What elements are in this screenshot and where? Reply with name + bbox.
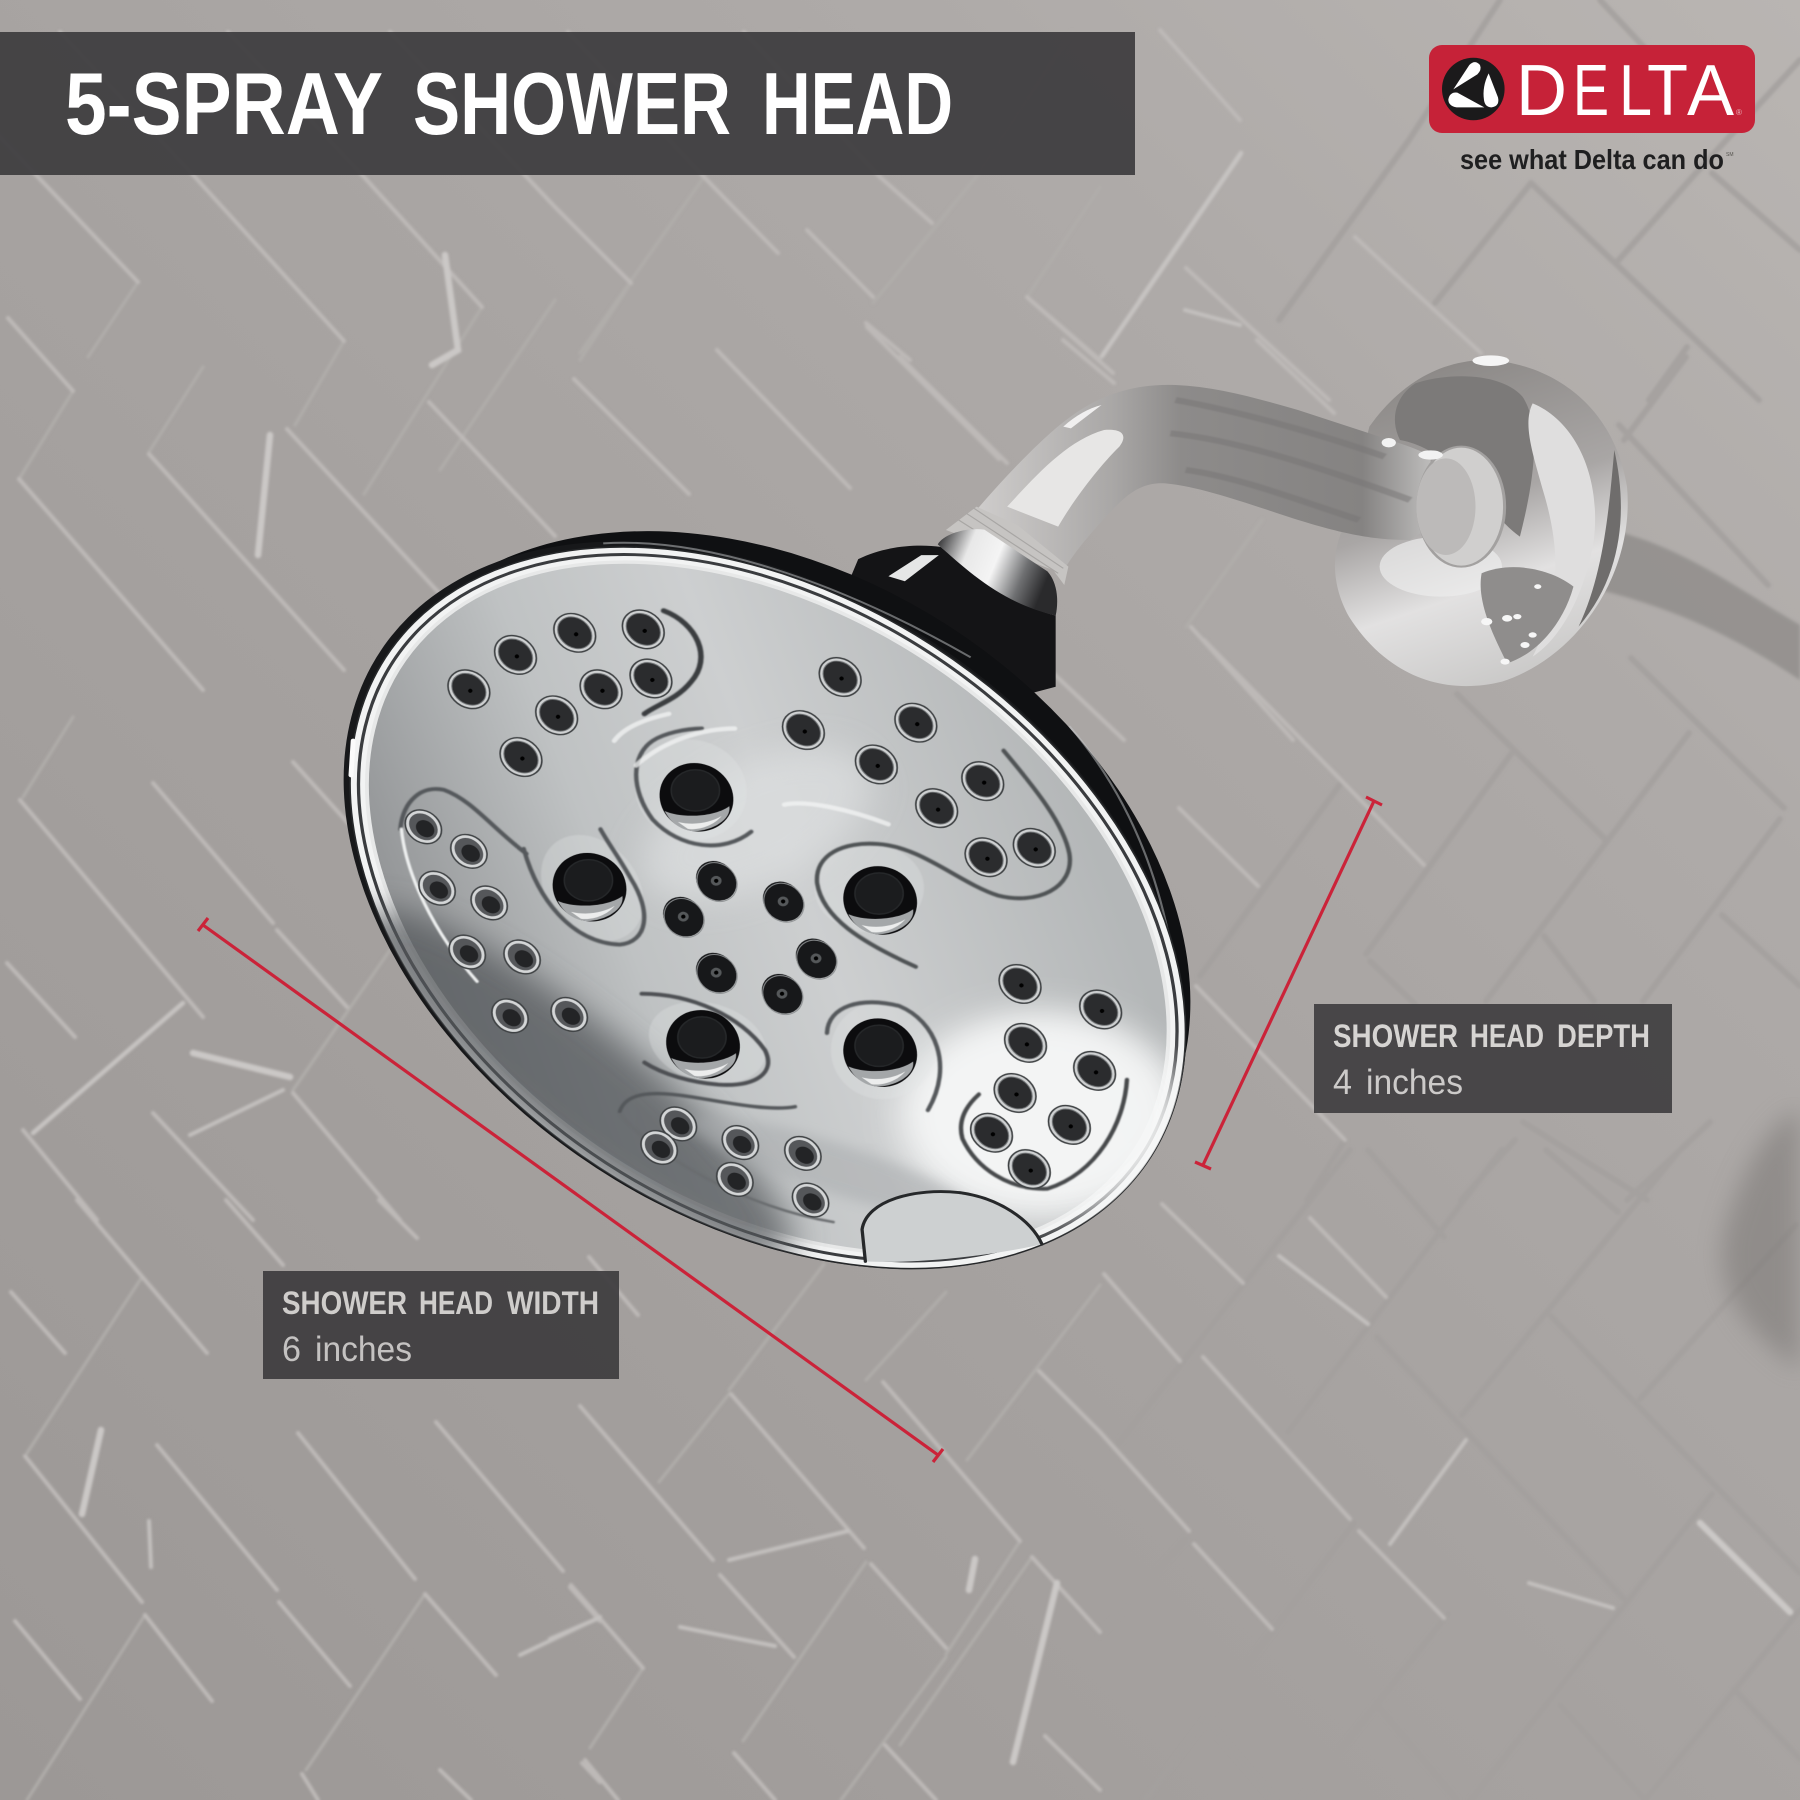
- pipe shadow at right: [1600, 530, 1800, 680]
- wall flange: [1335, 355, 1628, 686]
- shower head: [344, 529, 1190, 1270]
- callout: shower head width: [263, 1271, 619, 1379]
- logo badge: ®: [1736, 108, 1742, 117]
- spray recess swirls: [400, 611, 1127, 1222]
- head body: [184, 384, 1351, 1416]
- callout: shower head width: WIDTH: [507, 1285, 599, 1321]
- Delta logo: [1429, 45, 1755, 175]
- callout: shower head depth: SHOWER: [1333, 1018, 1458, 1054]
- logo badge: E: [1573, 51, 1609, 131]
- logo badge: L: [1619, 51, 1652, 131]
- nozzle group: bottom: [634, 1100, 836, 1223]
- spray selector tab: [862, 1192, 1042, 1262]
- logo badge: D: [1516, 51, 1567, 131]
- callout: shower head depth: DEPTH: [1557, 1018, 1650, 1054]
- title text: HEAD: [762, 54, 953, 153]
- logo badge: A: [1687, 51, 1734, 131]
- rim glare, left edge: [351, 741, 353, 775]
- callout: shower head depth: 4: [1333, 1063, 1352, 1102]
- nozzle group: right: [962, 957, 1130, 1196]
- Delta logo: SM: [1726, 152, 1734, 158]
- hole recess highlights: [520, 719, 935, 1099]
- nozzle group: center: [655, 854, 845, 1021]
- title text: 5-SPRAY: [65, 54, 383, 153]
- depth dimension line: [1195, 797, 1382, 1169]
- title text: [65, 54, 953, 153]
- chrome face: [348, 546, 1186, 1270]
- title bar: [0, 32, 1135, 175]
- callout: shower head width: HEAD: [419, 1285, 493, 1321]
- curved arm with threads: [946, 385, 1505, 585]
- nozzle group: left: [398, 803, 595, 1039]
- title text: SHOWER: [413, 54, 731, 153]
- shower arm and wall flange: [946, 355, 1628, 686]
- callout: shower head width: 6: [282, 1330, 301, 1369]
- nozzle group: upper right: [774, 650, 1064, 884]
- nozzle group: upper left: [439, 602, 680, 784]
- callout: shower head depth: [1314, 1004, 1672, 1113]
- callout: shower head depth: inches: [1366, 1063, 1463, 1102]
- logo badge: T: [1647, 51, 1688, 131]
- mounting nut and chrome collar: [834, 529, 1057, 716]
- logo badge: [1429, 45, 1755, 133]
- large spray outlets: [539, 751, 931, 1099]
- callout: shower head depth: HEAD: [1470, 1018, 1544, 1054]
- callout: shower head width: SHOWER: [282, 1285, 407, 1321]
- width dimension line: [198, 918, 943, 1462]
- tagline: see what Delta can do: [1460, 144, 1724, 175]
- callout: shower head width: inches: [315, 1330, 412, 1369]
